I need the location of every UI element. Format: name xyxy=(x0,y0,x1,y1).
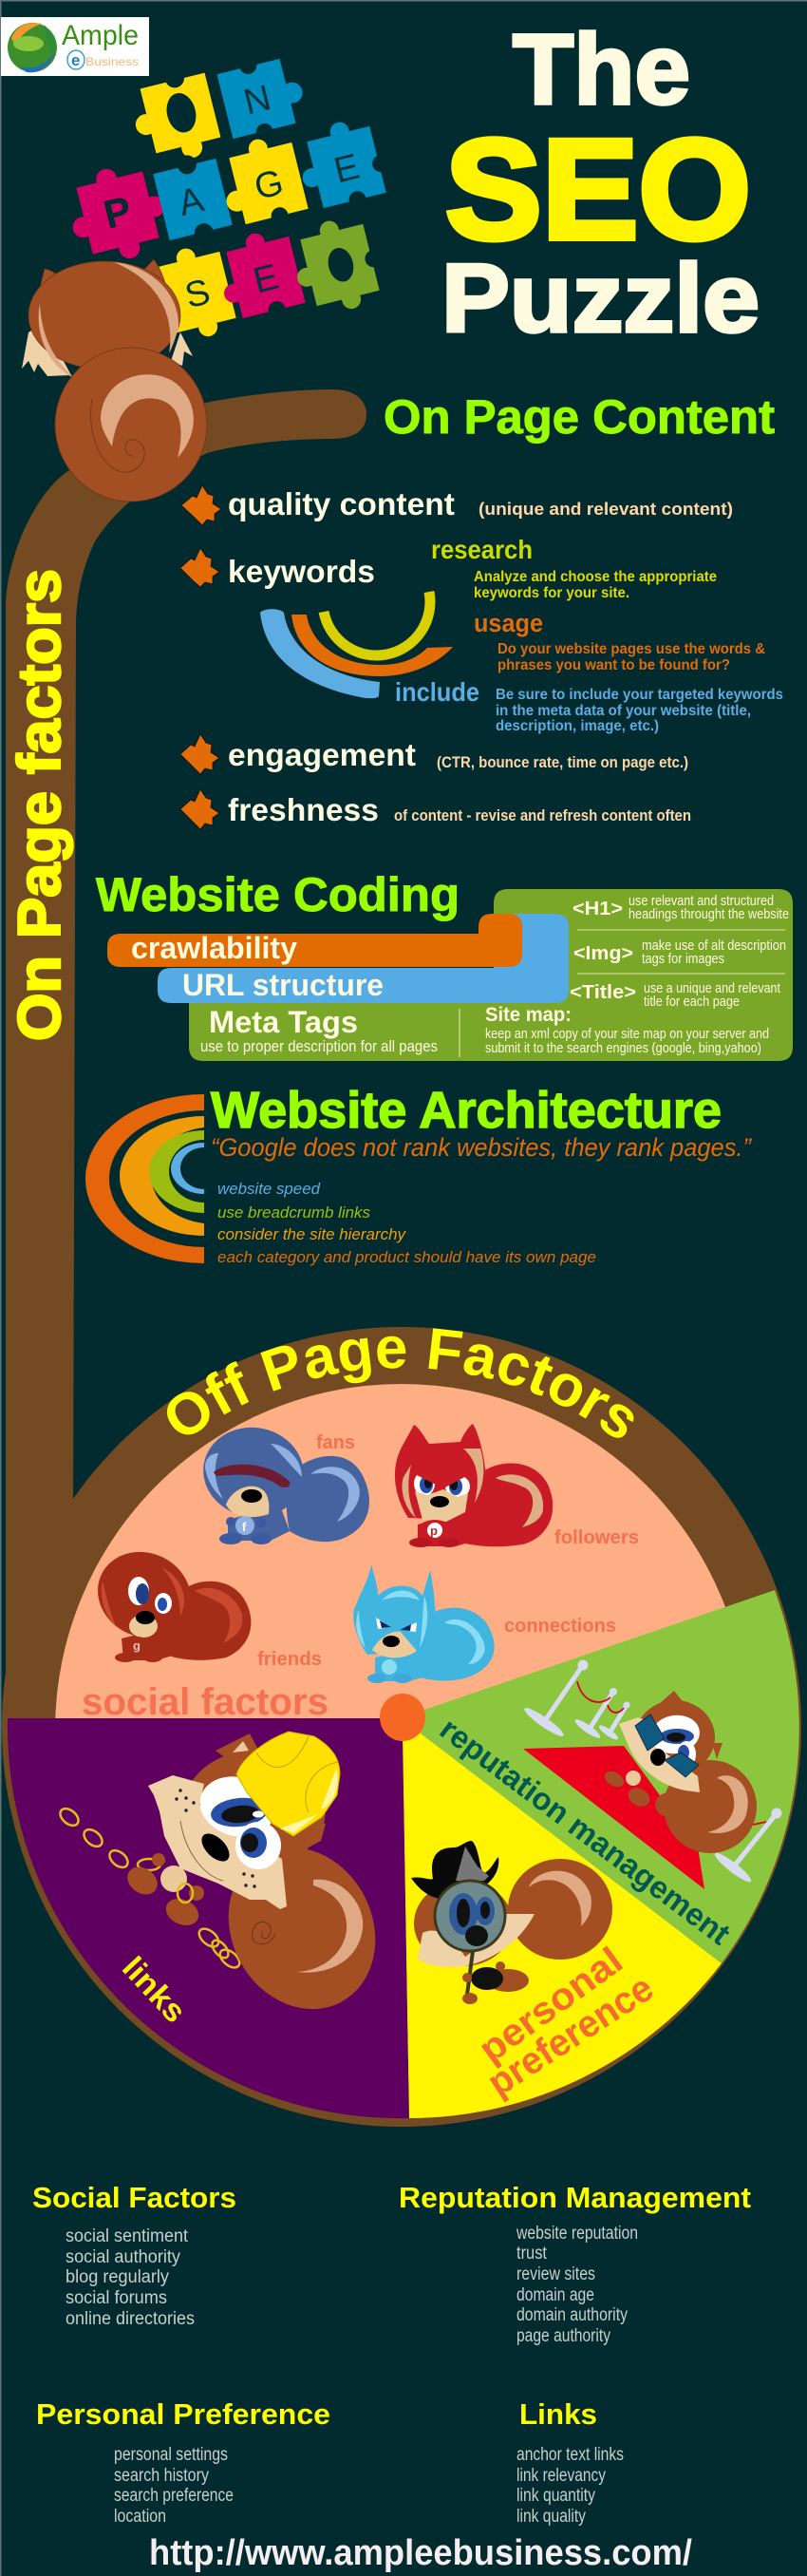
branch trunk xyxy=(6,389,366,1757)
footer url: http://www.ampleebusiness.com/ xyxy=(149,2533,692,2573)
title: SEO xyxy=(445,109,751,269)
site map block: submit it to the search engines (google, bing,yahoo) xyxy=(485,1040,761,1056)
title tag xyxy=(570,980,781,1010)
title tag: title for each page xyxy=(644,994,740,1010)
puzzle pieces: on page seo xyxy=(61,46,399,345)
blue panel xyxy=(158,914,569,1003)
keyword: research xyxy=(431,535,717,601)
h1 tag: use relevant and structured xyxy=(629,893,774,909)
keyword: include xyxy=(395,677,783,734)
label: followers: followers xyxy=(554,1527,639,1548)
piece N: N xyxy=(240,78,275,123)
list: social factors: social authority xyxy=(66,2247,180,2267)
piece E: E xyxy=(330,147,364,191)
list: reputation management: website reputation xyxy=(516,2224,638,2244)
squirrel: fans xyxy=(197,1420,369,1544)
icon: puzzle bullet xyxy=(180,789,219,829)
bullet keywords: keywords xyxy=(228,554,375,589)
links ring xyxy=(178,1884,193,1903)
piece O green xyxy=(286,211,392,320)
wheel rim xyxy=(2,1327,801,2127)
piece S: S xyxy=(181,272,215,316)
meta tags block xyxy=(200,1005,438,1055)
squirrel: friends: g xyxy=(133,1638,141,1653)
label: personal preference: preference xyxy=(480,1967,661,2105)
icon: puzzle bullet xyxy=(180,548,219,587)
piece S xyxy=(154,240,239,345)
icon: puzzle bullet xyxy=(180,734,219,774)
logo: e xyxy=(71,51,80,69)
list: reputation management: review sites xyxy=(516,2264,595,2284)
list: personal preference: search history xyxy=(114,2466,209,2486)
list: social factors: Social Factors xyxy=(32,2181,236,2214)
off page wheel xyxy=(2,1327,801,2127)
title: Puzzle xyxy=(441,244,760,352)
keyword: include: in the meta data of your website (title, xyxy=(496,703,751,719)
title tag: <Title> xyxy=(570,982,636,1003)
logo xyxy=(1,17,149,76)
piece G: G xyxy=(251,162,288,208)
list: personal preference xyxy=(36,2397,330,2527)
architecture list xyxy=(217,1180,596,1266)
architecture list: consider the site hierarchy xyxy=(217,1225,406,1243)
squirrel: fans: f xyxy=(242,1520,247,1534)
piece O xyxy=(124,62,224,169)
chain xyxy=(57,1806,243,1971)
heading: on page content: On Page Content xyxy=(384,390,775,444)
bullet quality content: (unique and relevant content) xyxy=(479,500,733,519)
ears xyxy=(33,259,167,313)
architecture list: website speed xyxy=(217,1180,321,1198)
img tag: tags for images xyxy=(642,951,724,967)
detective hat xyxy=(411,1841,498,1899)
keyword: include: Be sure to include your targeted keywords xyxy=(496,687,783,703)
fur xyxy=(22,323,193,376)
label: friends: friends xyxy=(257,1649,322,1670)
keyword: include: include xyxy=(395,677,479,707)
title xyxy=(441,14,760,352)
paws xyxy=(122,1862,162,1900)
bullet engagement: (CTR, bounce rate, time on page etc.) xyxy=(437,753,688,771)
piece E xyxy=(291,113,399,219)
list: links xyxy=(516,2397,624,2527)
img tag: <Img> xyxy=(573,943,633,964)
list: links: link relevancy xyxy=(516,2466,606,2486)
squirrel: reputation with sunglasses xyxy=(602,1691,757,1853)
squirrel: links with helmet and chain xyxy=(57,1732,404,2035)
img tag xyxy=(573,938,786,967)
site map block xyxy=(485,1004,769,1056)
list: links: link quality xyxy=(516,2507,586,2527)
green panel xyxy=(189,889,793,1061)
face xyxy=(148,1775,287,1909)
helmet xyxy=(236,1732,340,1836)
green reputation sector xyxy=(421,1590,799,1963)
squirrel from behind with tail xyxy=(22,259,207,502)
label: reputation management: reputation management xyxy=(434,1711,737,1951)
label: fans: fans xyxy=(316,1432,355,1453)
architecture arcs xyxy=(85,1094,204,1263)
list: personal preference: location xyxy=(114,2507,166,2527)
list: reputation management: page authority xyxy=(516,2326,610,2346)
piece G xyxy=(214,131,310,236)
squirrel: friends xyxy=(84,1537,251,1662)
keyword: usage xyxy=(474,609,765,673)
label: personal preference: personal xyxy=(471,1940,630,2071)
hub xyxy=(380,1694,425,1741)
squirrel: detective with magnifier xyxy=(411,1841,612,2004)
keyword: include: description, image, etc.) xyxy=(496,718,659,734)
list: social factors xyxy=(32,2181,236,2329)
list: social factors: online directories xyxy=(66,2309,195,2329)
bullet freshness xyxy=(180,789,691,829)
img tag: make use of alt description xyxy=(642,938,786,954)
squirrel: followers: p xyxy=(430,1524,438,1538)
vertical label: on page factors: On Page factors xyxy=(7,569,73,1041)
list: reputation management: domain authority xyxy=(516,2305,628,2325)
piece A xyxy=(151,148,235,251)
quote: “Google does not rank websites, they rank pages.” xyxy=(211,1133,752,1162)
red carpet xyxy=(523,1746,704,1889)
title tag: use a unique and relevant xyxy=(644,980,781,996)
keyword: usage: usage xyxy=(474,609,543,637)
keyword arcs xyxy=(260,592,453,698)
squirrel: connections xyxy=(353,1564,495,1683)
head xyxy=(183,1751,326,1868)
list: personal preference: search preference xyxy=(114,2486,234,2506)
label: links: links xyxy=(116,1950,194,2029)
list: links: Links xyxy=(519,2397,597,2431)
url structure label: URL structure xyxy=(182,968,384,1002)
keyword: research: research xyxy=(431,535,533,564)
bullet engagement xyxy=(180,734,688,774)
bullet freshness: of content - revise and refresh content often xyxy=(394,806,691,824)
logo: Ample xyxy=(62,20,139,51)
squirrel: followers xyxy=(395,1424,553,1547)
purple links sector xyxy=(8,1718,409,2118)
keyword: research: keywords for your site. xyxy=(474,585,629,601)
nose xyxy=(197,1828,235,1866)
body xyxy=(28,261,180,369)
magnifier xyxy=(435,1881,505,1951)
keyword: usage: phrases you want to be found for? xyxy=(497,657,730,673)
logo: Business xyxy=(85,55,139,68)
crawlability label: crawlability xyxy=(131,931,297,965)
tail spiral xyxy=(91,399,144,472)
body xyxy=(200,1822,404,2035)
list: social factors: blog regularly xyxy=(66,2267,169,2287)
bullet engagement: engagement xyxy=(228,737,416,772)
eyes xyxy=(193,1769,282,1845)
list: reputation management: Reputation Management xyxy=(399,2181,751,2214)
bullet freshness: freshness xyxy=(228,792,379,827)
yellow personal sector xyxy=(403,1733,722,2118)
list: reputation management: trust xyxy=(516,2244,548,2263)
heading: website architecture: Website Architecture xyxy=(211,1082,722,1139)
title: The xyxy=(513,14,690,125)
piece P xyxy=(61,157,176,271)
keyword: usage: Do your website pages use the words & xyxy=(497,641,765,657)
tail xyxy=(55,348,207,502)
orange panel xyxy=(107,914,522,967)
meta tags block: Meta Tags xyxy=(209,1005,358,1039)
architecture list: each category and product should have its own page xyxy=(217,1248,596,1266)
velvet rope posts xyxy=(522,1660,782,1885)
bullet quality content: quality content xyxy=(228,486,455,521)
list: links: link quantity xyxy=(516,2486,595,2506)
heading: website coding: Website Coding xyxy=(96,868,460,921)
list: social factors: social forums xyxy=(66,2288,167,2308)
piece A: A xyxy=(175,180,208,224)
heading: off page factors (curved): Off Page Factors xyxy=(167,1328,634,1438)
bullet keywords xyxy=(180,548,375,589)
piece E pink: E xyxy=(250,257,283,301)
architecture list: use breadcrumb links xyxy=(217,1203,370,1222)
h1 tag: <H1> xyxy=(572,899,623,919)
label: social factors: social factors xyxy=(82,1681,328,1723)
list: personal preference: personal settings xyxy=(114,2445,228,2465)
site map block: Site map: xyxy=(485,1004,572,1026)
piece N xyxy=(215,46,311,148)
coding diagram xyxy=(107,889,793,1061)
list: links: anchor text links xyxy=(516,2445,624,2465)
piece E pink xyxy=(212,225,308,330)
piece P: P xyxy=(100,187,136,237)
tail highlight xyxy=(101,374,194,458)
h1 tag xyxy=(572,893,789,922)
list: personal preference: Personal Preference xyxy=(36,2397,330,2431)
peach social sector xyxy=(55,1384,748,2077)
bullet quality content xyxy=(181,485,733,525)
list: reputation management xyxy=(399,2181,751,2346)
label: connections: connections xyxy=(504,1616,616,1637)
keyword: research: Analyze and choose the appropriate xyxy=(474,569,717,585)
list: social factors: social sentiment xyxy=(66,2226,189,2246)
icon: puzzle bullet xyxy=(181,485,221,525)
list: reputation management: domain age xyxy=(516,2285,594,2305)
meta tags block: use to proper description for all pages xyxy=(200,1037,438,1055)
body highlights xyxy=(39,262,178,378)
